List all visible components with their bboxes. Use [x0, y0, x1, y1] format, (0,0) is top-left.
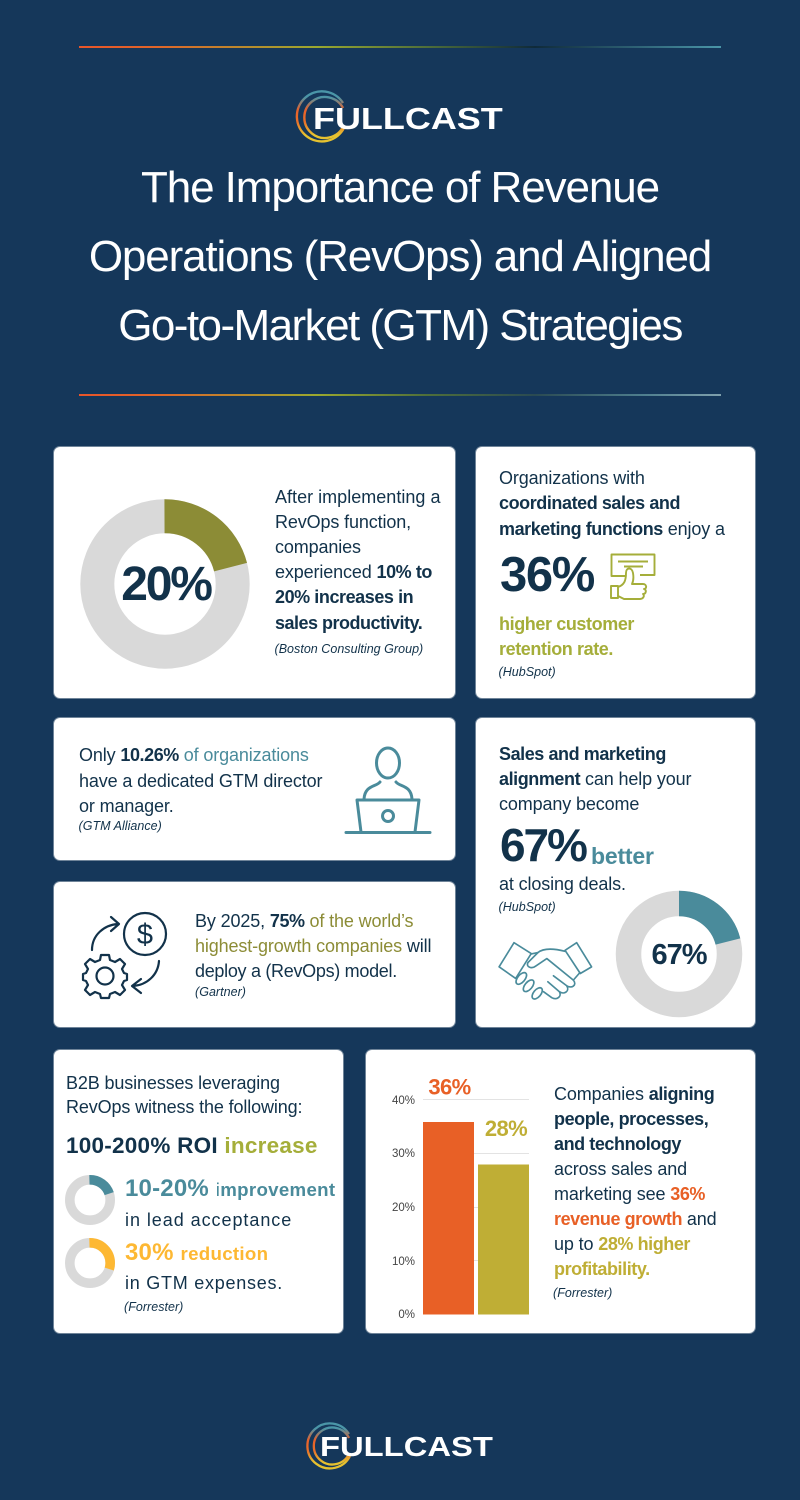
- panel: closing deals: [476, 718, 755, 1027]
- citation: (GTM Alliance): [78, 819, 162, 833]
- bar chart: 40%: [392, 1095, 415, 1107]
- bar chart: 30%: [392, 1148, 415, 1160]
- body text: highest-growth companies will: [195, 936, 431, 956]
- lower gradient rule: [79, 394, 721, 396]
- donut chart: 20%: 20%: [121, 558, 212, 611]
- intro text: RevOps witness the following:: [66, 1097, 302, 1117]
- body text: [554, 1084, 717, 1279]
- panel: revenue growth: [366, 1050, 755, 1333]
- intro text: [499, 744, 692, 814]
- panel: customer retention: [476, 447, 755, 698]
- stat label: better: [591, 843, 654, 869]
- stat detail: lead acceptance: in lead acceptance: [125, 1210, 292, 1230]
- body text: 20% increases in: [275, 587, 413, 607]
- logo rings: [296, 90, 345, 143]
- bar chart: 36%: [428, 1074, 471, 1100]
- bar chart: [392, 1074, 529, 1321]
- citation: (Forrester): [553, 1286, 612, 1300]
- footer logo: [306, 1422, 493, 1470]
- title: Go-to-Market (GTM) Strategies: [118, 301, 682, 350]
- title: [89, 163, 711, 350]
- intro text: company become: [499, 794, 639, 814]
- body text: [79, 745, 322, 816]
- intro text: B2B businesses leveraging: [66, 1072, 280, 1092]
- body text: deploy a (RevOps) model.: [195, 961, 397, 981]
- intro text: alignment can help your: [499, 769, 691, 789]
- citation: (HubSpot): [498, 900, 556, 914]
- body text: and technology: [554, 1134, 681, 1154]
- donut: GTM expenses: [65, 1238, 115, 1288]
- icon: money and gear cycle: [82, 912, 168, 1000]
- citation: (HubSpot): [498, 665, 556, 679]
- body text: By 2025, 75% of the world’s: [195, 910, 413, 930]
- logo wordmark: FULLCAST: [320, 1431, 493, 1462]
- body text: have a dedicated GTM director: [79, 770, 322, 790]
- stat: improvement: 10-20% improvement: [125, 1175, 335, 1202]
- bar chart: 0%: [398, 1309, 415, 1321]
- citation: (Boston Consulting Group): [274, 642, 423, 656]
- intro text: Organizations with: [499, 468, 645, 488]
- bar chart: 20%: [392, 1202, 415, 1214]
- body text: across sales and: [554, 1158, 687, 1178]
- stat: reduction: 30% reduction: [125, 1239, 268, 1266]
- intro text: Sales and marketing: [499, 744, 666, 764]
- big stat: 36%: [500, 548, 594, 602]
- highlight text: [499, 614, 634, 659]
- donut chart: 67%: [616, 890, 742, 1018]
- closing text: at closing deals.: [499, 874, 626, 894]
- body text: sales productivity.: [275, 613, 422, 633]
- bar chart: 10%: [392, 1256, 415, 1268]
- bar chart: 28%: [485, 1116, 527, 1141]
- body text: or manager.: [79, 796, 174, 816]
- body text: Only 10.26% of organizations: [79, 745, 309, 765]
- highlight text: higher customer: [499, 614, 634, 634]
- top gradient rule: [79, 46, 721, 48]
- citation: (Gartner): [195, 985, 246, 999]
- body text: people, processes,: [554, 1108, 708, 1128]
- donut: lead acceptance: [65, 1175, 115, 1225]
- intro text: coordinated sales and: [499, 493, 680, 513]
- title: Operations (RevOps) and Aligned: [89, 232, 711, 281]
- body text: After implementing a: [275, 486, 440, 506]
- big stat: 67%: [500, 819, 586, 871]
- body text: companies: [275, 537, 361, 557]
- intro text: [66, 1072, 302, 1117]
- title: The Importance of Revenue: [141, 163, 659, 212]
- highlight text: retention rate.: [499, 639, 613, 659]
- logo rings: [306, 1422, 351, 1470]
- donut chart: 20%: [80, 499, 250, 669]
- body text: revenue growth and: [554, 1208, 717, 1228]
- intro text: marketing functions enjoy a: [499, 519, 725, 539]
- panel: ROI: [54, 1050, 343, 1333]
- ROI headline: 100-200% ROI increase: [66, 1133, 318, 1158]
- icon: handshake: [498, 942, 592, 1000]
- body text: [195, 910, 431, 981]
- icon: person at laptop: [344, 746, 432, 834]
- body text: RevOps function,: [275, 512, 411, 532]
- donut chart: 67%: 67%: [651, 939, 708, 971]
- panel: sales productivity: [54, 447, 455, 698]
- icon: money and gear cycle: $: [137, 919, 153, 951]
- panel: GTM director: [54, 718, 455, 860]
- stat detail: GTM expenses: in GTM expenses.: [125, 1273, 283, 1293]
- body text: Companies aligning: [554, 1084, 714, 1104]
- logo wordmark: FULLCAST: [313, 100, 503, 136]
- body text: profitability.: [554, 1258, 650, 1278]
- icon: thumbs up feedback: [610, 554, 656, 600]
- body text: marketing see 36%: [554, 1184, 705, 1204]
- body text: up to 28% higher: [554, 1234, 690, 1254]
- body text: experienced 10% to: [275, 562, 432, 582]
- panel: 2025 forecast: [54, 882, 455, 1027]
- intro text: [499, 468, 725, 539]
- body text: [275, 486, 440, 633]
- header logo: [296, 90, 503, 143]
- citation: (Forrester): [124, 1300, 183, 1314]
